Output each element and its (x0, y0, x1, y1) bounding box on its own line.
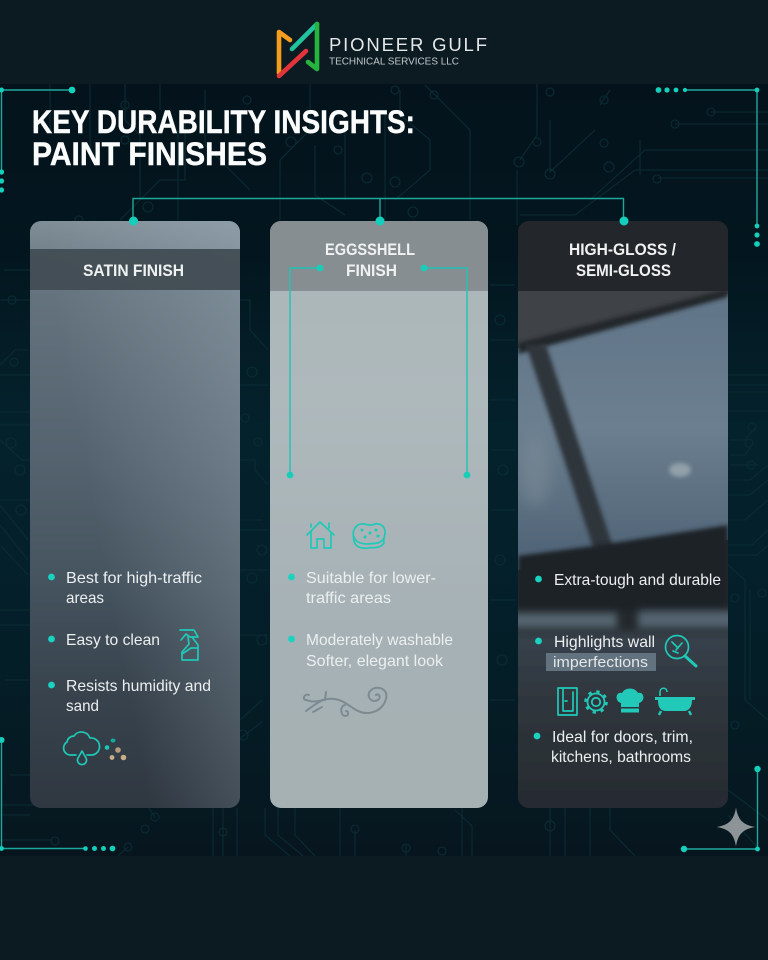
satin bullet list: sand (66, 698, 99, 715)
eggshell heading: EGGSSHELL (325, 240, 415, 259)
gloss card reflection (518, 221, 728, 808)
eggshell bullet list (288, 570, 453, 670)
satin card surface (30, 221, 240, 808)
gloss bullet list (534, 572, 721, 766)
top connector lines (129, 198, 628, 226)
icon: humidity cloud with sand (64, 732, 126, 765)
gloss bullet list: Extra-tough and durable (554, 572, 721, 589)
gloss bullet list: imperfections (553, 654, 648, 671)
gloss bullet list: Ideal for doors, trim, (552, 729, 693, 746)
title: PAINT FINISHES (32, 136, 267, 172)
frame corner: top left (0, 87, 75, 193)
eggshell bullet list: Suitable for lower- (306, 570, 436, 587)
icon: sponge (353, 524, 385, 548)
title (32, 104, 415, 172)
satin bullet list: Easy to clean (66, 632, 160, 649)
frame corner: top right (656, 87, 760, 247)
satin bullet list (48, 570, 211, 715)
eggshell heading (325, 240, 415, 280)
eggshell heading: FINISH (346, 261, 397, 280)
eggshell bullet list: traffic areas (306, 590, 391, 607)
icon: gear (586, 692, 606, 712)
logo tagline: TECHNICAL SERVICES LLC (329, 56, 459, 68)
icon: bathtub (655, 688, 695, 715)
frame corner: bottom right (681, 766, 761, 852)
logo (279, 24, 487, 76)
eggshell card surface (270, 221, 488, 808)
eggshell bullet list: Softer, elegant look (306, 653, 444, 670)
frame corner: bottom left (0, 737, 115, 851)
icon: sparkle star (716, 808, 756, 846)
eggshell bullet list: Moderately washable (306, 632, 453, 649)
icon: door (558, 688, 577, 715)
satin bullet list: Resists humidity and (66, 678, 211, 695)
icon: decorative swirl (304, 688, 386, 716)
logo wordmark: PIONEER GULF (329, 34, 487, 55)
gloss heading: HIGH-GLOSS / (569, 240, 676, 259)
gloss heading (569, 240, 676, 280)
icon: spray bottle (180, 630, 198, 660)
logo mark (279, 24, 317, 76)
satin heading: SATIN FINISH (83, 261, 184, 280)
icon: house (307, 522, 334, 548)
gloss heading: SEMI-GLOSS (576, 261, 671, 280)
panel: satin finish (30, 221, 240, 808)
title: KEY DURABILITY INSIGHTS: (32, 104, 415, 140)
satin bullet list: areas (66, 590, 104, 607)
icon: chef hat (617, 688, 643, 712)
gloss bullet list: kitchens, bathrooms (551, 749, 691, 766)
panel: eggshell finish (270, 221, 488, 808)
satin bullet list: Best for high-traffic (66, 570, 202, 587)
icon: magnifier (666, 636, 696, 666)
gloss bullet list: Highlights wall (554, 634, 655, 651)
eggshell bracket connector (287, 265, 470, 478)
panel: high-gloss / semi-gloss (518, 221, 728, 808)
